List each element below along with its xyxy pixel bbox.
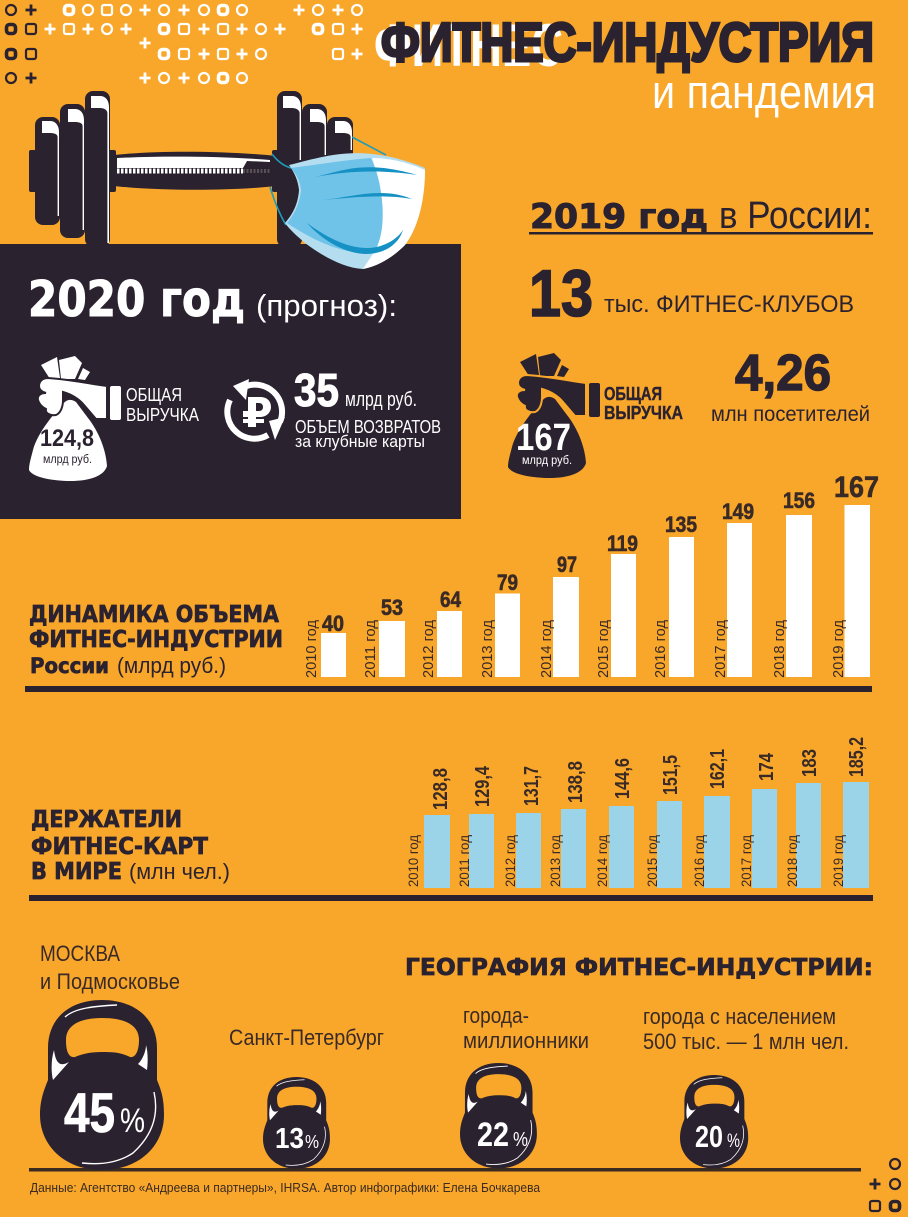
kettlebell 13% [263, 1077, 330, 1169]
year labels: 2013 год [479, 620, 496, 678]
stat: visitors: 4,26 [735, 344, 831, 401]
kettlebell 13%: % [305, 1132, 319, 1152]
year labels: 2012 год [502, 835, 518, 887]
heading: 2019 in Russia: 2019 год [530, 197, 708, 237]
bar chart: industry volume [303, 471, 879, 678]
chart heading: industry volume: (млрд руб.) [117, 653, 226, 678]
title [374, 11, 876, 118]
text: total revenue label 2020: ВЫРУЧКА [126, 404, 200, 425]
text: total revenue label 2019 [604, 383, 683, 423]
year labels: 2019 год [830, 620, 847, 678]
bar values: 119 [607, 531, 638, 556]
text: total revenue label 2019: ОБЩАЯ [604, 383, 662, 404]
label: million cities: миллионники [463, 1028, 589, 1053]
kettlebell 22% [460, 1063, 537, 1168]
icon: face mask [270, 137, 425, 269]
label: million cities [463, 1003, 589, 1053]
kettlebell 45% [40, 1000, 164, 1170]
stat: visitors: млн посетителей [711, 403, 870, 426]
bar values: 144,6 [612, 758, 634, 799]
heading: 2020 [28, 271, 397, 328]
kettlebell 45%: 45 [64, 1081, 115, 1144]
kettlebell 13%: 13 [275, 1123, 304, 1155]
year labels: 2016 год [691, 835, 707, 887]
label: Saint Petersburg: Санкт-Петербург [229, 1025, 384, 1050]
text: revenue value 2019: млрд руб. [522, 453, 572, 467]
icon: money bag 2020 [29, 356, 121, 481]
bar values: 185,2 [846, 737, 868, 777]
year labels: 2011 год [362, 620, 379, 678]
year labels: 2010 год [405, 835, 421, 887]
text: refunds: за клубные карты [295, 433, 425, 451]
kettlebell 22%: % [513, 1129, 528, 1151]
label: Moscow [40, 941, 180, 994]
bar values: 162,1 [707, 749, 729, 789]
year labels: 2018 год [771, 620, 788, 678]
note: forecast: (прогноз): [256, 288, 397, 323]
year labels: 2019 год [830, 835, 846, 887]
bar values: 149 [722, 499, 754, 524]
bar values: 64 [440, 587, 462, 612]
chart heading: card holders: ДЕРЖАТЕЛИ [31, 807, 182, 833]
label: Moscow: и Подмосковье [40, 969, 180, 994]
text: refunds [294, 364, 441, 451]
bar values: 167 [834, 471, 879, 504]
bar values: 138,8 [565, 761, 587, 803]
bar values: 156 [783, 488, 815, 513]
label: Moscow: МОСКВА [40, 941, 120, 966]
year labels: 2015 год [644, 835, 660, 887]
year labels: 2011 год [456, 835, 472, 887]
year labels: 2018 год [784, 835, 800, 887]
text: revenue value 2019: 167 [516, 417, 571, 459]
text: refunds: ОБЪЕМ ВОЗВРАТОВ [295, 416, 441, 437]
bar values: 135 [665, 512, 697, 537]
year labels [405, 835, 846, 887]
label: 500k cities [643, 1004, 849, 1054]
chart heading: industry volume [29, 602, 283, 678]
bar values: 129,4 [472, 765, 494, 807]
year labels: 2012 год [420, 620, 437, 678]
stat: fitness clubs: 13 [529, 256, 593, 330]
subtitle: и пандемия [652, 65, 876, 118]
chart heading: industry volume: ДИНАМИКА ОБЪЕМА [29, 602, 279, 628]
bar values: 97 [557, 552, 577, 577]
title shadow: ФИТНЕС [374, 12, 563, 79]
chart heading: industry volume: России [30, 654, 109, 678]
bar values: 40 [322, 611, 344, 636]
decorative pattern: dark bottom right [870, 1159, 900, 1211]
label: 500k cities: 500 тыс. — 1 млн чел. [643, 1029, 849, 1054]
bar values: 128,8 [430, 768, 452, 810]
kettlebell 22%: 22 [477, 1116, 509, 1154]
text: total revenue label 2020 [126, 384, 200, 425]
chart heading: card holders [31, 807, 230, 885]
text: revenue value 2020: 124,8 [40, 425, 94, 452]
text: total revenue label 2019: ВЫРУЧКА [604, 402, 683, 423]
heading: geography: ГЕОГРАФИЯ ФИТНЕС-ИНДУСТРИИ: [405, 955, 873, 981]
bar rects [424, 782, 869, 888]
text: refunds: 35 [294, 364, 339, 416]
label: million cities: города- [463, 1003, 529, 1028]
text: revenue value 2020 [40, 425, 94, 466]
bar values: 79 [497, 570, 518, 595]
year labels: 2013 год [547, 835, 563, 887]
year labels: 2014 год [538, 620, 555, 678]
kettlebell 20%: % [727, 1131, 740, 1152]
stat: fitness clubs [529, 256, 854, 330]
bar values: 183 [799, 749, 821, 777]
year labels: 2016 год [652, 620, 669, 678]
text: revenue value 2020: млрд руб. [43, 452, 92, 466]
kettlebell 20% [680, 1075, 748, 1168]
bar rects [321, 505, 870, 677]
bar values: 131,7 [521, 766, 543, 806]
bar values [430, 737, 868, 810]
decorative pattern: white top [44, 4, 362, 84]
year labels: 2015 год [595, 620, 612, 678]
panel: 2020 forecast [0, 244, 461, 519]
text: total revenue label 2020: ОБЩАЯ [126, 384, 182, 405]
chart heading: card holders: В МИРЕ [31, 859, 122, 885]
icon: ruble refund arrows [227, 379, 285, 440]
source note: Данные: Агентство «Андреева и партнеры», IHRSA. Автор инфографики: Елена Бочкарева [30, 1180, 541, 1195]
stat: fitness clubs: тыс. ФИТНЕС-КЛУБОВ [604, 291, 854, 318]
chart heading: card holders: ФИТНЕС-КАРТ [31, 834, 208, 860]
chart heading: card holders: (млн чел.) [129, 859, 230, 884]
heading: 2019 in Russia [529, 195, 873, 237]
heading: 2019 in Russia: в России: [719, 195, 872, 237]
year labels: 2017 год [738, 835, 754, 887]
icon: dumbbell [29, 91, 353, 247]
ground line [29, 1168, 861, 1172]
kettlebell 20%: 20 [695, 1119, 723, 1154]
icon: money bag 2019 [508, 353, 600, 478]
year labels: 2014 год [594, 835, 610, 887]
bar values: 174 [756, 752, 778, 781]
text: refunds: млрд руб. [345, 389, 417, 411]
year labels: 2010 год [303, 620, 320, 678]
heading: 2020: 2020 год [28, 271, 245, 328]
bar values: 151,5 [660, 755, 682, 795]
label: 500k cities: города с населением [643, 1004, 836, 1029]
kettlebell 45%: % [120, 1102, 145, 1140]
year labels: 2017 год [712, 620, 729, 678]
chart heading: industry volume: ФИТНЕС-ИНДУСТРИИ [29, 627, 283, 653]
year labels [303, 620, 847, 678]
bar values: 53 [381, 595, 403, 620]
bar chart: card holders [405, 737, 869, 888]
bar values [322, 471, 879, 636]
decorative pattern: dark top left [6, 4, 36, 84]
stat: visitors [711, 344, 870, 426]
